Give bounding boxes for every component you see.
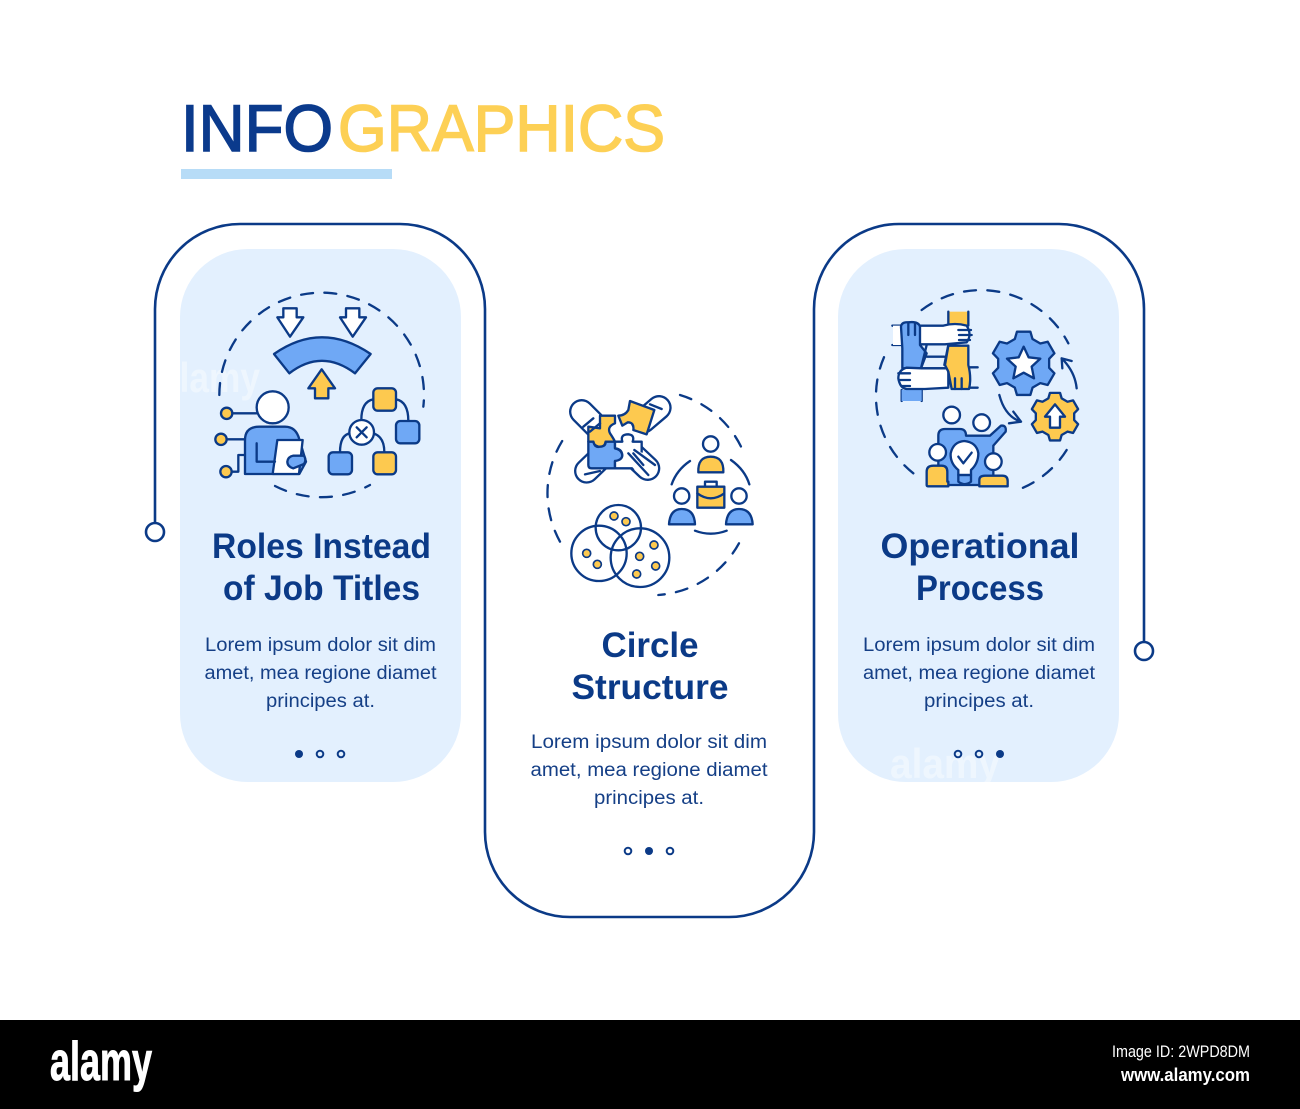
panel: roles background bbox=[180, 249, 461, 782]
text block: roles bbox=[204, 635, 437, 712]
heading: circle structure: Circle bbox=[602, 626, 698, 665]
title bbox=[181, 91, 665, 165]
icon: roles, person and flowchart bbox=[215, 293, 424, 497]
text block: circle structure bbox=[530, 732, 768, 809]
pagination dots: operational process bbox=[955, 750, 1004, 758]
text block: circle structure: Lorem ipsum dolor sit dim bbox=[531, 732, 767, 753]
panel: operational process background bbox=[838, 249, 1119, 782]
heading: roles bbox=[212, 527, 431, 608]
text block: roles: principes at. bbox=[266, 691, 375, 712]
text block: circle structure: principes at. bbox=[594, 788, 704, 809]
text block: roles: amet, mea regione diamet bbox=[204, 663, 437, 684]
pagination dots: roles bbox=[295, 750, 344, 758]
text block: operational process: amet, mea regione diamet bbox=[863, 663, 1096, 684]
title underline bar bbox=[181, 169, 392, 179]
heading: operational process: Operational bbox=[880, 527, 1080, 566]
text block: operational process: Lorem ipsum dolor sit dim bbox=[863, 635, 1095, 656]
footer image id: Image ID: 2WPD8DM bbox=[1112, 1042, 1250, 1061]
heading: operational process bbox=[880, 527, 1080, 608]
text block: roles: Lorem ipsum dolor sit dim bbox=[205, 635, 436, 656]
watermark: right panel: alamy bbox=[890, 740, 1001, 787]
footer url: www.alamy.com bbox=[1120, 1065, 1250, 1085]
text block: circle structure: amet, mea regione diamet bbox=[530, 760, 768, 781]
footer logo: alamy bbox=[50, 1030, 152, 1092]
title: INFO bbox=[181, 91, 333, 165]
heading: circle structure bbox=[572, 626, 728, 707]
heading: operational process: Process bbox=[916, 569, 1044, 608]
icon: operational process, hands, gears, team bbox=[876, 290, 1078, 488]
heading: circle structure: Structure bbox=[572, 668, 728, 707]
text block: operational process: principes at. bbox=[924, 691, 1034, 712]
heading: roles: of Job Titles bbox=[223, 569, 420, 608]
watermark: left panel: alamy bbox=[160, 354, 261, 401]
heading: roles: Roles Instead bbox=[212, 527, 431, 566]
connecting outline with end nodes bbox=[146, 224, 1153, 917]
footer bar bbox=[0, 1020, 1300, 1109]
text block: operational process bbox=[863, 635, 1096, 712]
pagination dots: circle structure bbox=[625, 847, 673, 855]
icon: circle structure, puzzle, team, venn bbox=[547, 395, 753, 595]
title: GRAPHICS bbox=[338, 91, 665, 165]
